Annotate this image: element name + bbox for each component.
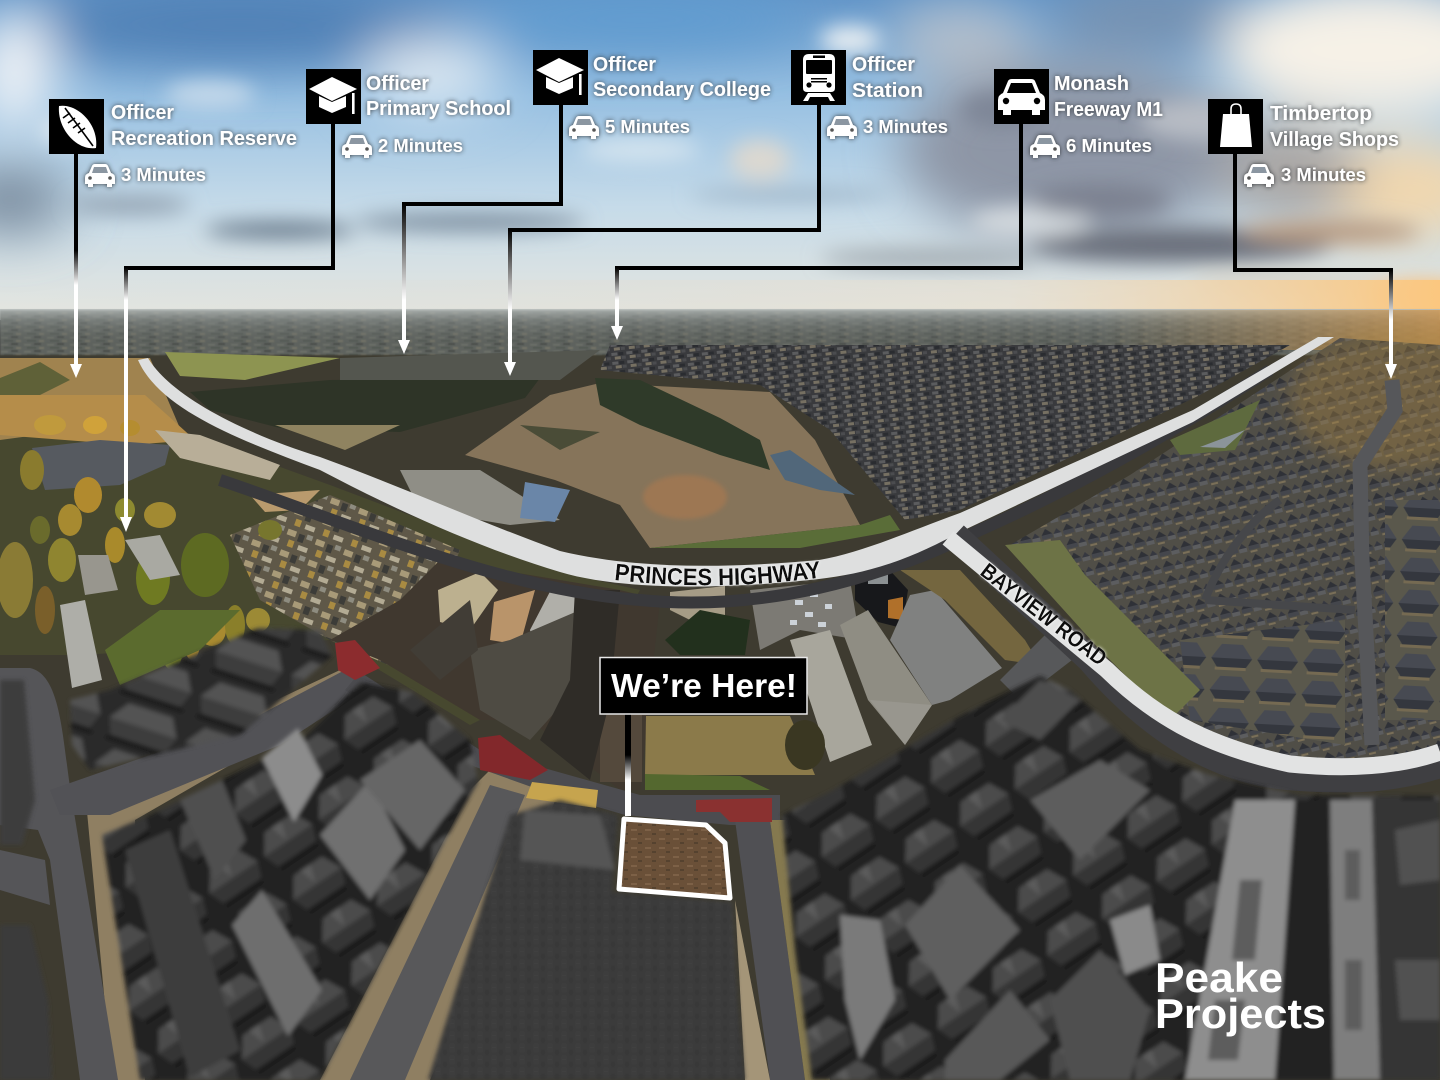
destination text: Recreation Reserve bbox=[111, 128, 297, 150]
mixed trees in left fields bbox=[0, 362, 70, 400]
corner road bbox=[345, 672, 780, 825]
destination text: 2 Minutes bbox=[378, 136, 463, 156]
lower streets bbox=[0, 640, 830, 1080]
destination text: Freeway M1 bbox=[1054, 99, 1163, 121]
icon: graduation cap bbox=[533, 50, 588, 105]
north south residential road bbox=[1360, 380, 1395, 745]
black building bbox=[855, 565, 908, 628]
destination text bbox=[342, 73, 511, 158]
block left upper bbox=[0, 680, 35, 845]
roundabout approach bbox=[1000, 620, 1085, 700]
destination text: Officer bbox=[111, 102, 174, 124]
factory buildings bbox=[438, 572, 750, 655]
retirement complex bbox=[32, 440, 170, 490]
block E dark tree strip bbox=[1275, 800, 1335, 1080]
site boundary plot bbox=[619, 819, 730, 898]
icon: football bbox=[49, 99, 104, 154]
car lot and highway frontage bbox=[750, 580, 860, 650]
central brown field bbox=[465, 383, 860, 548]
destination text bbox=[827, 54, 948, 139]
block E bright roofs bbox=[840, 680, 1160, 1080]
left street bbox=[0, 668, 118, 1080]
callout: We're Here: We’re Here! bbox=[611, 667, 797, 704]
orange fields bbox=[0, 395, 195, 445]
sky with clouds bbox=[0, 0, 1440, 320]
leader line: Officer Primary School bbox=[120, 124, 333, 532]
industrial lots centre bbox=[330, 560, 660, 790]
central field tree belts and pond bbox=[520, 378, 900, 548]
destination text: 3 Minutes bbox=[1281, 165, 1366, 185]
woodland band bbox=[190, 378, 540, 432]
warm light on upper right suburb bbox=[1290, 330, 1440, 470]
icon: train bbox=[791, 50, 846, 105]
light building ghost in block D bbox=[520, 810, 615, 870]
speckled distant estate bbox=[340, 350, 600, 380]
greyscale neighbouring blocks bbox=[0, 628, 1440, 1080]
block B lighter roofs bbox=[125, 728, 465, 1078]
left yellow fields bbox=[0, 358, 185, 440]
icon: graduation cap bbox=[306, 69, 361, 124]
block B bbox=[102, 682, 478, 1080]
destination text: 6 Minutes bbox=[1066, 136, 1152, 156]
leader line: Officer Recreation Reserve bbox=[70, 154, 82, 378]
logo: Peake Projects: Projects bbox=[1155, 990, 1326, 1037]
bushes bbox=[785, 720, 825, 770]
road label: Princes Highway: PRINCES HIGHWAY bbox=[614, 559, 820, 588]
callout pointer bbox=[625, 712, 631, 816]
verge right bbox=[770, 820, 830, 1080]
sheds and lawn bbox=[60, 535, 240, 688]
highway dark carriageway bbox=[220, 370, 1270, 603]
near right houses bbox=[1180, 620, 1345, 745]
destination text bbox=[569, 54, 771, 139]
long grey warehouses bbox=[790, 610, 932, 762]
destination text: Secondary College bbox=[593, 79, 771, 101]
destination text: Officer bbox=[593, 54, 656, 76]
timber yard bbox=[230, 495, 460, 670]
destination: Officer Secondary College bbox=[533, 50, 771, 139]
destination text: Monash bbox=[1054, 73, 1129, 95]
far right houses bbox=[1385, 500, 1440, 720]
red crossing A bbox=[335, 640, 380, 680]
leader line: Timbertop Village Shops bbox=[1235, 154, 1397, 379]
left parkland base bbox=[0, 420, 640, 725]
street verge tan bbox=[85, 670, 560, 1080]
destination text: Station bbox=[852, 80, 923, 102]
shop buildings bbox=[155, 430, 280, 480]
destination: Officer Recreation Reserve bbox=[49, 99, 297, 187]
destination text: 3 Minutes bbox=[863, 117, 948, 137]
highway white overlay bbox=[138, 337, 1334, 587]
grass beside Bayview Road bbox=[1005, 540, 1200, 720]
logo: Peake Projects: Peake bbox=[1155, 954, 1283, 1001]
logo: Peake Projects bbox=[1155, 954, 1326, 1037]
destination text: 5 Minutes bbox=[605, 117, 690, 137]
verge left of south road bbox=[735, 900, 770, 1080]
paddock bbox=[645, 716, 815, 775]
destination text: Primary School bbox=[366, 98, 511, 120]
destination text bbox=[1030, 73, 1163, 158]
local loop road bbox=[1205, 500, 1355, 610]
warm sun glow on distant land bbox=[1100, 310, 1440, 350]
block A bbox=[70, 628, 332, 770]
gravel lots bbox=[410, 590, 620, 780]
Bayview Road white overlay bbox=[948, 538, 1440, 767]
block D bbox=[428, 800, 745, 1080]
carpark bbox=[890, 590, 1002, 705]
wetland bbox=[1170, 400, 1260, 455]
destination: Officer Station bbox=[791, 50, 948, 139]
road label: Bayview Road: BAYVIEW ROAD bbox=[978, 561, 1108, 664]
callout: We're Here bbox=[600, 658, 807, 714]
destination text: Officer bbox=[366, 73, 429, 95]
block E far houses bbox=[1372, 800, 1440, 1080]
horizon haze bbox=[0, 309, 1440, 349]
upper left street bbox=[50, 670, 365, 815]
red crossing B bbox=[478, 735, 548, 780]
aerial ground bbox=[0, 309, 1440, 1080]
destination text bbox=[85, 102, 297, 187]
red crossing C bbox=[696, 798, 772, 822]
destination text: Timbertop bbox=[1270, 103, 1372, 125]
destination: Timbertop Village Shops bbox=[1208, 99, 1399, 187]
icon: shopping bag bbox=[1208, 99, 1263, 154]
block E light strip bbox=[1185, 800, 1295, 1080]
green field bbox=[165, 352, 340, 380]
blue roofed shed bbox=[520, 482, 570, 522]
dry paddock strip bbox=[275, 425, 400, 450]
trees bbox=[0, 415, 282, 670]
destination text bbox=[1244, 103, 1399, 187]
angled centre street bbox=[350, 785, 525, 1080]
yellow tactile mat bbox=[526, 782, 598, 808]
block E bbox=[782, 676, 1440, 1080]
destination: Monash Freeway M1 bbox=[994, 69, 1163, 158]
distant suburbs bbox=[0, 310, 1440, 355]
hedge bbox=[645, 774, 770, 790]
icon: car bbox=[994, 69, 1049, 124]
block left lower bbox=[0, 925, 52, 1080]
far suburb bbox=[600, 345, 1290, 520]
destination text: Village Shops bbox=[1270, 129, 1399, 151]
caravan yard bbox=[400, 470, 560, 525]
Bayview Road dark lane bbox=[955, 535, 1440, 779]
block E tile strip bbox=[1395, 820, 1440, 1020]
block E car strip bbox=[1330, 800, 1380, 1080]
road south of site bbox=[735, 820, 805, 1080]
factory roofs bbox=[250, 490, 320, 512]
destination text: Officer bbox=[852, 54, 915, 76]
destination: Officer Primary School bbox=[306, 69, 511, 158]
landscaped verge bbox=[900, 570, 1040, 665]
lot beside paddock bbox=[600, 715, 642, 782]
leader line: Officer Station bbox=[504, 105, 819, 376]
leader line: Officer Secondary College bbox=[398, 105, 561, 354]
light strip details bbox=[1208, 850, 1362, 1060]
parked cars bbox=[780, 592, 832, 627]
destination text: 3 Minutes bbox=[121, 165, 206, 185]
right suburb bbox=[1010, 338, 1440, 770]
leader line: Monash Freeway M1 bbox=[611, 124, 1021, 340]
